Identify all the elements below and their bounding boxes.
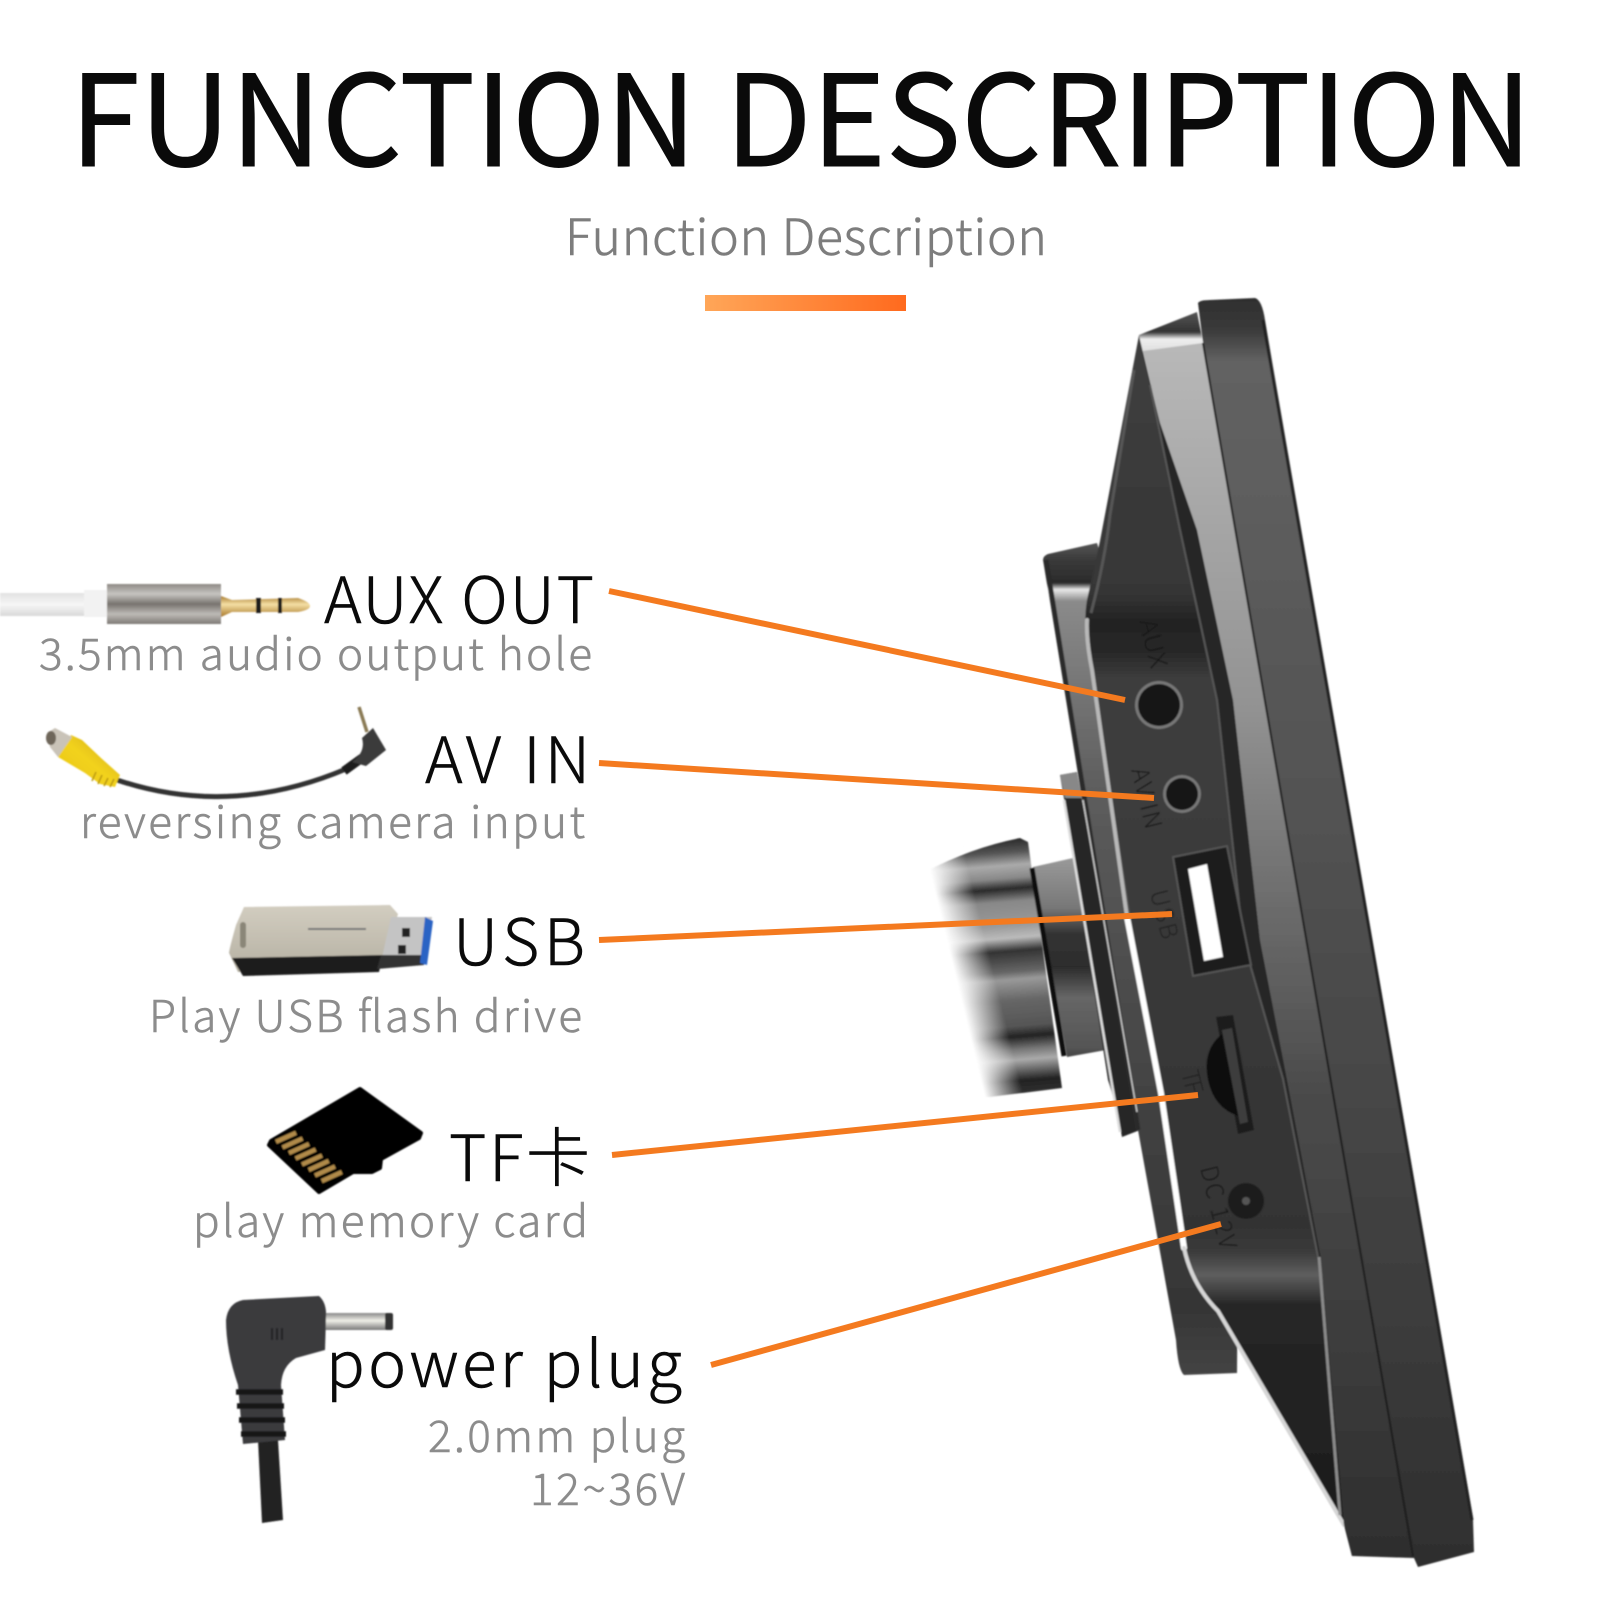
mount plate	[1060, 772, 1140, 1137]
callout line: power plug	[711, 1224, 1221, 1365]
label: USB: USB	[453, 892, 585, 984]
device: side view of monitor	[900, 298, 1474, 1567]
port label: USB: USB	[1143, 885, 1189, 942]
description: TF card: play memory card	[193, 1186, 588, 1250]
description: USB: Play USB flash drive	[149, 981, 582, 1045]
description: power plug voltage: 12~36V	[530, 1454, 686, 1518]
label: power plug: power plug	[326, 1314, 682, 1406]
callout line: USB	[599, 914, 1172, 940]
port: USB slot	[1173, 846, 1251, 976]
icon: RCA camera cable	[46, 707, 386, 797]
callout line: AV IN	[599, 763, 1154, 798]
panel right edge line	[1150, 385, 1318, 1257]
description: AUX OUT: 3.5mm audio output hole	[39, 619, 592, 683]
icon: USB flash drive	[229, 905, 433, 976]
mount knob	[900, 830, 1062, 1105]
description: AV IN: reversing camera input	[80, 787, 585, 851]
subtitle: Function Description	[565, 198, 1047, 270]
port: AV jack	[1163, 775, 1201, 813]
mount cylinder	[1033, 858, 1106, 1057]
icon: TF memory card	[269, 1089, 421, 1192]
port: DC jack	[1228, 1183, 1264, 1219]
port label: AUX: AUX	[1132, 614, 1178, 671]
panel body with ports	[1085, 335, 1350, 1525]
back plate thin light line	[1083, 800, 1137, 1112]
top ramp with highlight	[1139, 312, 1203, 352]
white edge highlight	[1087, 620, 1344, 1525]
port label: DC 12V: DC 12V	[1193, 1161, 1248, 1253]
panel upper inner edge	[1091, 370, 1134, 613]
port label: TF: TF	[1174, 1065, 1214, 1097]
back plate	[1043, 543, 1240, 1375]
frame	[1198, 298, 1474, 1567]
callout line: AUX OUT	[609, 591, 1125, 700]
port label: AV IN: AV IN	[1124, 763, 1173, 832]
frame inner seam	[1203, 343, 1413, 1556]
port: AUX jack	[1135, 681, 1183, 729]
description: power plug size: 2.0mm plug	[428, 1401, 685, 1465]
orange accent bar	[705, 295, 906, 311]
port: TF card slot	[1207, 1015, 1254, 1134]
dark groove between bevel and panel	[1150, 385, 1321, 1257]
label: AV IN: AV IN	[425, 710, 590, 802]
icon: power plug	[226, 1296, 393, 1523]
lower bright edge	[1319, 1257, 1340, 1515]
silver bevel	[1143, 343, 1413, 1556]
label: AUX OUT: AUX OUT	[324, 550, 594, 642]
label: TF card: TF卡	[449, 1108, 590, 1200]
title: FUNCTION DESCRIPTION	[70, 21, 1532, 203]
frame edge line	[1263, 320, 1472, 1520]
callout line: TF card	[612, 1095, 1198, 1155]
icon: 3.5mm audio jack	[0, 584, 310, 624]
back plate dark edge	[1046, 560, 1138, 1130]
mount cylinder edge	[1032, 868, 1064, 1056]
